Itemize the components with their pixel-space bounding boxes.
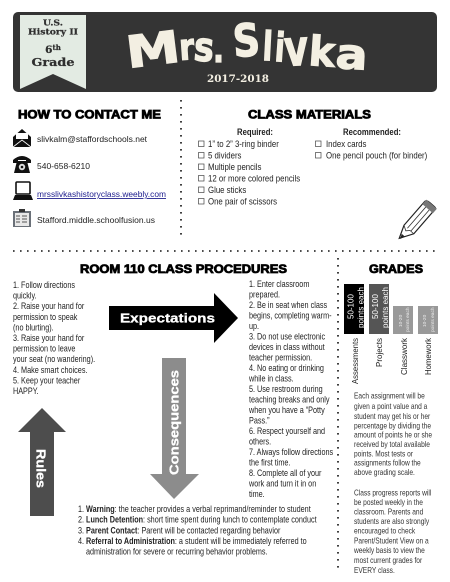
rules list: quickly. (13, 291, 37, 301)
bar chart: grade weights: 50-100 (346, 294, 356, 319)
expectations list: 6. Respect yourself and (249, 426, 325, 436)
expectations list: begins, completing warm- (249, 311, 332, 321)
icon: laptop (13, 182, 33, 200)
recommended list (316, 127, 427, 161)
grade ribbon: th (52, 43, 61, 52)
progress reports note: EVERY class. (354, 565, 395, 575)
progress reports note: be posted weekly in the (354, 497, 423, 507)
title: v (283, 19, 310, 78)
rules list: 4. Make smart choices. (13, 365, 87, 375)
expectations list: time. (249, 489, 265, 499)
bar chart: grade weights: Classwork (399, 337, 409, 375)
consequences list: 3. Parent Contact: Parent will be contacted regarding behavior (78, 526, 281, 536)
consequences list: 4. Referral to Administration: a student will be immediately referred to (78, 536, 307, 546)
grade ribbon (20, 15, 86, 89)
expectations list: 5. Use restroom during (249, 384, 323, 394)
expectations list: 8. Complete all of your (249, 468, 322, 478)
expectations list: Pass.” (249, 416, 270, 426)
heading: materials: CLASS MATERIALS (248, 108, 371, 122)
grading explanation: percentage by dividing the (354, 421, 431, 430)
icon: clipboard (13, 209, 31, 227)
rules list: 5. Keep your teacher (13, 376, 81, 386)
contact website: mrsslivkashistoryclass.weebly.com (37, 189, 166, 199)
rules list: 3. Raise your hand for (13, 333, 85, 343)
expectations list: prepared. (249, 290, 280, 300)
rules list: 1. Follow directions (13, 280, 75, 290)
arrow: consequences: Consequences (166, 370, 182, 475)
bar chart: grade weights: points each (381, 287, 390, 328)
grading explanation: student may get his or her (354, 411, 431, 421)
arrow: expectations: Expectations (120, 311, 215, 326)
grade ribbon: U.S. (43, 18, 63, 28)
progress reports note: Class progress reports will (354, 488, 432, 498)
arrow: rules (18, 408, 66, 516)
title: k (307, 27, 338, 77)
expectations list (248, 279, 333, 499)
title (123, 13, 369, 80)
required list (198, 127, 300, 207)
rules list: permission to speak (13, 312, 78, 322)
progress reports note: encouraged to check (354, 526, 415, 536)
header banner (13, 12, 437, 92)
expectations list: devices in class without (249, 342, 325, 352)
grading explanation: points. Most tests or (354, 449, 413, 458)
title: i (273, 25, 286, 72)
expectations list: 2. Be in seat when class (249, 300, 327, 310)
bar chart: grade weights: 10-20 (422, 314, 428, 327)
school year: 2017-2018 (207, 74, 269, 85)
icon: pencil (395, 200, 437, 244)
required list: Glue sticks (208, 184, 246, 195)
heading: contact: HOW TO CONTACT ME (18, 108, 161, 122)
grading explanation: Each assignment will be (354, 391, 425, 401)
progress reports note: students are also strongly (354, 516, 429, 526)
required list: Multiple pencils (208, 161, 261, 172)
grading explanation: received by total available (354, 439, 430, 449)
expectations list: 7. Always follow directions (249, 447, 333, 457)
bar chart: grade weights: Homework (423, 337, 433, 375)
expectations list: 3. Do not use electronic (249, 332, 325, 342)
bar chart: grade weights: points each (405, 307, 411, 332)
bar chart: grade weights: points each (356, 287, 366, 328)
panel: how to contact me (13, 108, 166, 227)
expectations list: others. (249, 437, 271, 447)
progress reports note: weekly basis to view the (353, 545, 425, 555)
contact email: slivkalm@staffordschools.net (37, 134, 148, 144)
grading explanation (354, 391, 432, 477)
expectations list: teacher permission. (249, 353, 312, 363)
expectations list: while in class. (248, 374, 294, 384)
title: s (192, 24, 216, 72)
bar chart: grade weights: 50-100 (371, 294, 380, 319)
panel: room 110 class procedures (13, 262, 333, 557)
title: S (231, 13, 262, 68)
heading: procedures: ROOM 110 CLASS PROCEDURES (80, 262, 287, 276)
recommended list: One pencil pouch (for binder) (326, 150, 427, 161)
arrow: expectations (109, 293, 238, 343)
required list: Required: (237, 127, 273, 137)
consequences list: 1. Warning: the teacher provides a verbal reprimand/reminder to student (78, 504, 311, 514)
recommended list: Recommended: (343, 127, 401, 137)
grade ribbon: History II (28, 28, 78, 38)
rules list (13, 280, 95, 396)
expectations list: work and turn it in on (248, 479, 316, 489)
required list: 1” to 2” 3-ring binder (208, 138, 279, 149)
progress reports note: Parent/Student View on a (354, 536, 429, 545)
progress reports note (353, 488, 432, 575)
grading explanation: above grading scale. (354, 467, 415, 477)
arrow: rules: Rules (34, 449, 48, 488)
contact school portal: Stafford.middle.schoolfusion.us (37, 215, 155, 225)
progress reports note: most current grades for (354, 555, 423, 565)
panel: grades (344, 262, 438, 575)
consequences list: 2. Lunch Detention: short time spent during lunch to contemplate conduct (78, 515, 317, 525)
expectations list: 1. Enter classroom (249, 279, 310, 289)
bar chart: grade weights: 10-20 (398, 314, 404, 327)
title: a (334, 29, 369, 80)
consequences list (78, 504, 317, 557)
title: . (213, 30, 224, 71)
bar chart: grade weights: Projects (374, 338, 384, 367)
required list: 12 or more colored pencils (208, 173, 300, 184)
recommended list: Index cards (326, 138, 366, 149)
rules list: (no blurting). (13, 323, 54, 333)
title: M (123, 22, 183, 79)
arrow: consequences (150, 358, 199, 499)
required list: One pair of scissors (208, 196, 277, 207)
heading: grades: GRADES (369, 262, 423, 276)
rules list: permission to leave (13, 344, 76, 354)
bar chart: grade weights: points each (430, 307, 436, 332)
expectations list: teaching breaks and only (249, 395, 330, 405)
expectations list: when you have a “Potty (248, 405, 325, 415)
expectations list: up. (249, 321, 259, 331)
title: r (178, 27, 196, 69)
title: l (261, 24, 274, 71)
rules list: HAPPY. (13, 386, 39, 396)
grading explanation: assignments follow the (354, 458, 421, 468)
panel: class materials (198, 108, 437, 244)
contact phone: 540-658-6210 (37, 161, 90, 171)
expectations list: the first time. (249, 458, 290, 468)
grading explanation: given a point value and a (354, 401, 428, 411)
progress reports note: classroom. Parents and (354, 507, 423, 517)
rules list: 2. Raise your hand for (13, 302, 85, 311)
icon: envelope (13, 129, 31, 147)
grade ribbon: Grade (32, 56, 74, 69)
expectations list: 4. No eating or drinking (249, 363, 324, 373)
icon: telephone (13, 156, 31, 173)
bar chart: grade weights (344, 284, 438, 384)
required list: 5 dividers (208, 150, 241, 161)
rules list: your seat (no wandering). (13, 355, 95, 364)
consequences list: administration for severe or recurring behavior problems. (86, 547, 268, 557)
grade ribbon: 6 (45, 44, 52, 56)
grading explanation: amount of points he or she (354, 430, 432, 440)
bar chart: grade weights: Assessments (350, 338, 360, 384)
